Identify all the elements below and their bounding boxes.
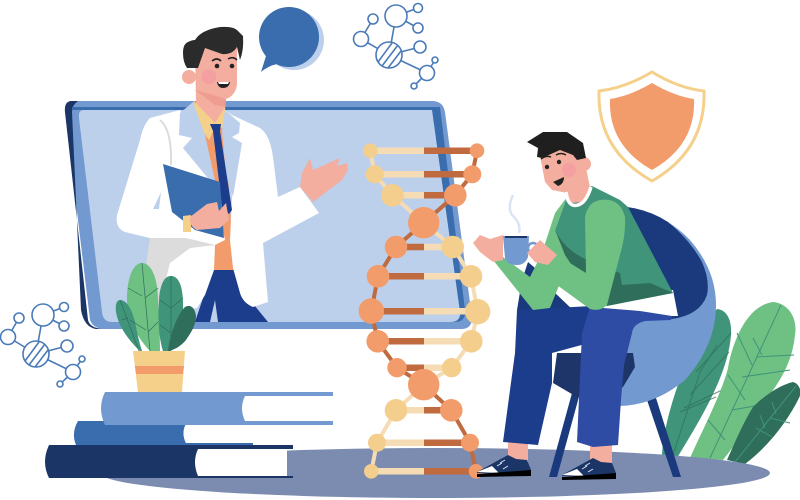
doctor [117,27,348,322]
doctor coat left panel [117,110,225,245]
chair underside [553,353,635,397]
DNA orange nodes [359,143,484,479]
man front leg [577,307,672,447]
doctor hair [183,27,243,68]
steam [510,195,519,233]
man hair [527,132,586,160]
doctor eyes, brows and mouth [212,58,237,61]
middle book [74,421,333,445]
left shoe [477,455,531,477]
chair gap under torso [600,290,678,316]
chair [517,207,716,477]
chair inner back [615,207,708,320]
bottom book [45,445,293,478]
doctor cuff and hand [183,215,191,232]
man eyes, brows and mouth [541,154,566,159]
man back leg [503,306,600,445]
speech bubble [259,7,324,72]
monitor [65,101,472,329]
chair front edge behind arm [517,262,575,312]
background leaves [662,302,800,464]
doctor coat shadow [146,238,215,322]
doctor tie [210,124,232,214]
coffee cup [503,236,538,265]
man torso shading [555,230,673,306]
man right arm [545,200,625,310]
man left arm [493,197,575,310]
potted plant [116,263,196,392]
man neck and face [540,143,590,203]
DNA backbone strands [370,151,478,471]
man ear and cheek [577,157,591,171]
doctor coat lower panel [165,245,215,312]
doctor shirt [203,128,234,270]
man hand right [527,240,557,265]
top book [101,392,333,425]
monitor screen [79,110,460,322]
chair legs [549,393,681,477]
chair shell [590,207,716,406]
plant leaves [127,263,160,351]
doctor lapels [179,102,242,197]
doctor folder [163,164,224,238]
right shoe [562,458,616,480]
doctor collar [193,100,226,140]
DNA double helix [359,143,490,479]
ground shadow [100,448,770,498]
plant pot [133,351,185,392]
books [45,392,333,478]
doctor jaw shadow [195,90,226,107]
doctor coat right panel [225,110,319,307]
molecule: top right [354,4,438,89]
shield [599,72,704,181]
molecule: bottom left [0,302,85,387]
doctor trousers [195,268,268,322]
man hand left [473,235,503,262]
doctor ear and cheek [182,70,196,84]
seated man [473,132,673,480]
doctor raised hand [300,158,348,202]
DNA rungs [370,151,478,471]
man ankles [508,440,612,465]
man torso [555,186,673,305]
man collar [566,187,591,205]
DNA yellow nodes [363,143,490,479]
doctor neck and face [195,48,237,124]
